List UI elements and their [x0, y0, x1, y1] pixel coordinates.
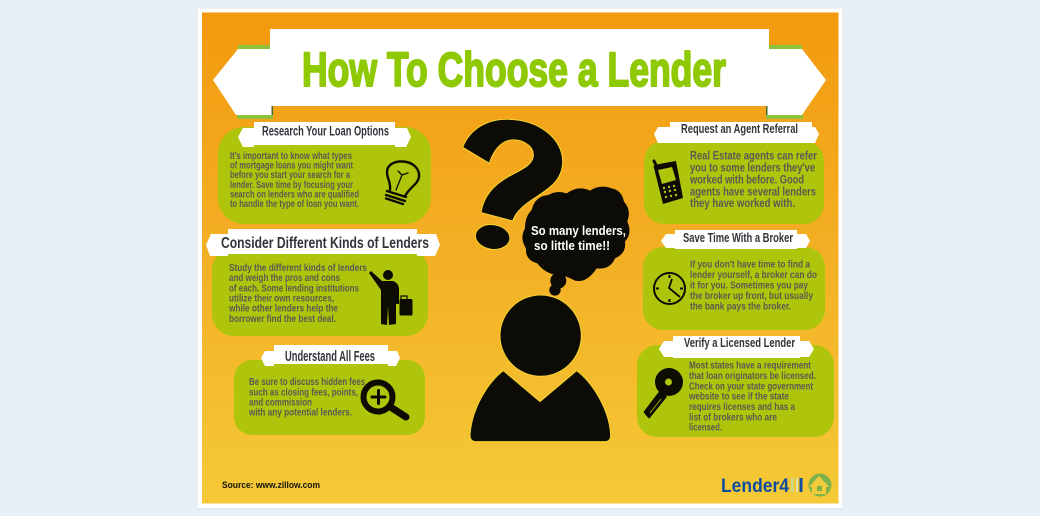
body text: Most states have a requirement	[689, 360, 811, 372]
body text	[688, 360, 816, 434]
body text: worked with before. Good	[689, 172, 804, 186]
title banner	[213, 29, 826, 119]
body text: agents have several lenders	[690, 184, 816, 198]
body text: requires licenses and has a	[689, 401, 795, 413]
heading: Consider Different Kinds of Lenders	[221, 235, 429, 252]
body text: Be sure to discuss hidden fees	[249, 376, 365, 388]
body text: of each. Some lending institutions	[229, 282, 359, 294]
source note: Source: www.zillow.com	[222, 480, 320, 490]
body text	[689, 148, 817, 210]
body text: such as closing fees, points,	[249, 386, 358, 398]
body text: list of brokers who are	[689, 412, 777, 424]
panel: consider different kinds of lenders	[206, 229, 440, 336]
body text: that loan originators be licensed.	[689, 370, 816, 382]
logo: Lender4	[721, 475, 789, 497]
body text: with any potential lenders.	[248, 406, 352, 418]
thought bubble text: so little time!!	[534, 238, 610, 253]
body text	[690, 258, 817, 312]
body text: lender yourself, a broker can do	[690, 269, 817, 281]
body text: lender. Save time by focusing your	[230, 179, 353, 191]
central figure: person silhouette	[470, 295, 611, 442]
heading: Research Your Loan Options	[262, 124, 389, 138]
thought bubble	[522, 187, 630, 296]
panel: request an agent referral	[644, 122, 824, 224]
body text: you to some lenders they've	[690, 160, 815, 174]
panel: save time with a broker	[643, 230, 825, 330]
icon: person with briefcase	[369, 270, 412, 325]
central figure: question mark	[463, 119, 563, 252]
icon: clock	[654, 273, 685, 304]
icon: light bulb	[386, 161, 419, 204]
body text: It's important to know what types	[230, 150, 352, 162]
body text: the broker up front, but usually	[690, 290, 813, 302]
body text: they have worked with.	[690, 196, 795, 210]
body text: If you don't have time to find a	[690, 258, 810, 270]
body text: Check on your state government	[689, 380, 813, 392]
icon: magnifying glass	[364, 382, 406, 417]
thought bubble text: So many lenders,	[531, 223, 626, 238]
heading: Understand All Fees	[285, 348, 375, 365]
body text: website to see if the state	[688, 390, 789, 402]
body text: Study the different kinds of lenders	[229, 262, 367, 274]
body text	[230, 150, 359, 210]
heading: Verify a Licensed Lender	[684, 336, 795, 350]
body text: borrower find the best deal.	[229, 313, 336, 325]
logo	[721, 474, 832, 497]
panel: verify a licensed lender	[637, 336, 834, 437]
body text: while other lenders help the	[228, 302, 338, 314]
body text: of mortgage loans you might want	[230, 160, 353, 172]
icon: mobile phone	[654, 161, 683, 204]
body text: utilize their own resources,	[229, 292, 334, 304]
body text: search on lenders who are qualified	[230, 188, 359, 200]
background panel	[202, 12, 838, 504]
heading: Save Time With a Broker	[683, 231, 793, 245]
body text: before you start your search for a	[230, 169, 350, 181]
body text: Real Estate agents can refer	[690, 148, 817, 162]
body text	[248, 376, 365, 418]
body text: to handle the type of loan you want.	[230, 198, 359, 210]
body text: and weigh the pros and cons	[229, 272, 340, 284]
body text: licensed.	[689, 422, 722, 434]
body text	[228, 262, 367, 325]
thought bubble text	[531, 223, 626, 253]
body text: and commission	[249, 396, 312, 408]
panel: understand all fees	[234, 345, 425, 435]
body text: it for you. Sometimes you pay	[690, 280, 808, 292]
icon: key	[645, 368, 683, 417]
panel: research your loan options	[218, 122, 431, 224]
heading: Request an Agent Referral	[681, 122, 798, 136]
title: How To Choose a Lender	[302, 44, 726, 97]
body text: the bank pays the broker.	[690, 300, 791, 312]
